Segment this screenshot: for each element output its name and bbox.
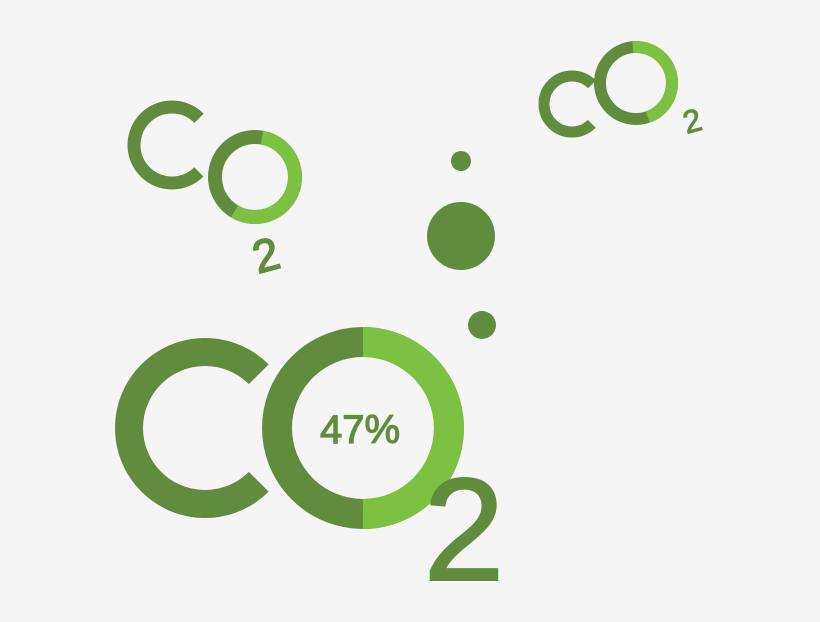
ring O large chart (277, 342, 449, 514)
percentage label: 47% (320, 408, 400, 452)
subscript 2 large: 2 (423, 448, 505, 611)
letter C small (118, 91, 226, 199)
ring O top-right (597, 44, 675, 122)
small CO2 top-right (532, 44, 706, 144)
small CO2 top-left (118, 91, 301, 283)
letter C top-right (532, 64, 612, 144)
subscript 2 top-right: 2 (679, 101, 706, 141)
bubbles (427, 151, 496, 339)
letter C large (98, 321, 312, 535)
subscript 2 small: 2 (247, 227, 285, 283)
large CO2 with 47% (98, 321, 505, 611)
ring O small (209, 131, 301, 223)
